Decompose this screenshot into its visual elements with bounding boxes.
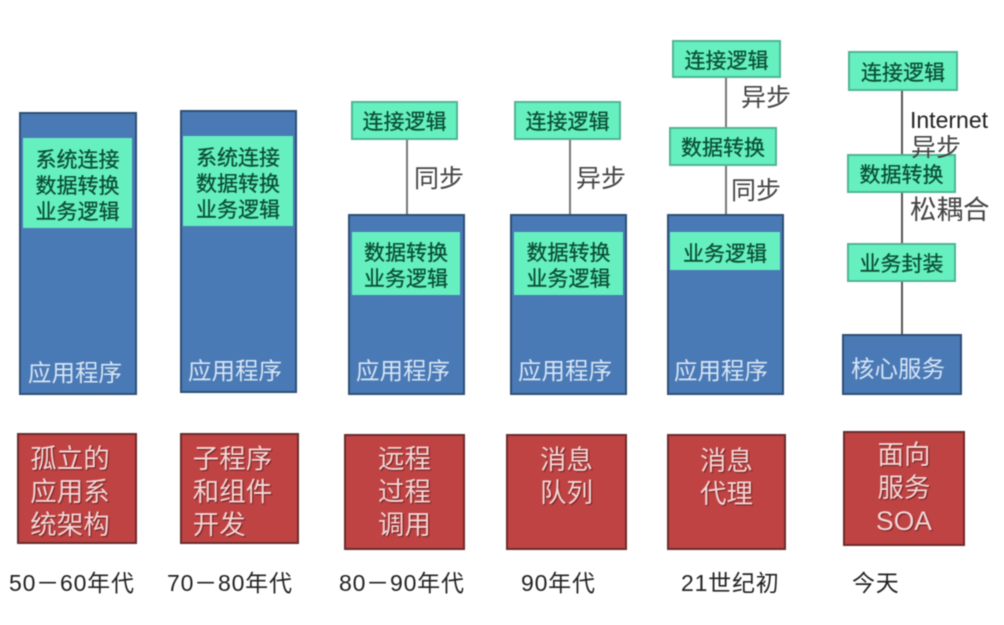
green logic box 1: 业务逻辑 [36,200,120,224]
async label 5: 异步 [741,84,791,112]
green logic box 1: 系统连接 [36,148,120,172]
green logic box 3: 数据转换 [364,242,448,265]
connector line 4 [569,139,571,215]
red box 6: 面向 [878,440,930,470]
blue application block 4 [510,214,627,395]
application label 5: 应用程序 [674,358,768,384]
green logic box 2: 系统连接 [196,146,280,170]
internet label: Internet [910,107,988,133]
green connection box 4: 连接逻辑 [526,111,610,134]
column: early 21st century message broker [666,39,791,596]
blue application block 1 [19,112,137,395]
red box 6 [843,431,965,546]
column: 90s message queue [505,100,628,596]
blue application block 3 [348,214,465,395]
green logic box 1: 数据转换 [36,174,120,198]
red box 3 [344,434,465,550]
green logic box 2 [183,136,293,226]
green transform box 5: 数据转换 [681,137,765,160]
red box 4: 消息 [540,445,593,475]
green logic box 5 [670,232,780,270]
green connection box 5: 连接逻辑 [684,50,768,72]
red box 1: 应用系 [30,477,110,507]
red box 3: 调用 [378,510,431,540]
column: 70-80s subprograms [167,109,300,596]
green logic box 4: 业务逻辑 [526,268,610,291]
red box 1: 孤立的 [30,444,110,474]
red box 2 [180,433,299,544]
green logic box 4 [514,232,623,295]
green connection box 3 [351,101,458,140]
era label 6: 今天 [852,570,900,596]
column: 80-90s remote procedure call [339,100,466,596]
green connection box 4 [514,101,621,140]
green logic box 5: 业务逻辑 [683,242,767,266]
red box 4: 队列 [540,478,593,508]
green logic box 3 [352,232,460,295]
connector line 6 [901,90,903,335]
application label 4: 应用程序 [518,358,612,384]
era label 3: 80－90年代 [339,570,465,596]
red box 6: SOA [876,506,932,536]
sync label 5: 同步 [731,177,781,205]
green service wrapper box: 业务封装 [860,253,944,276]
blue application block 2 [180,110,297,393]
blue application block 5 [667,214,784,395]
red box 3: 远程 [378,444,431,474]
column: 50-60s isolated architecture [9,111,138,596]
red box 6: 服务 [878,473,930,503]
application label 3: 应用程序 [356,358,450,384]
async label 6: 异步 [911,134,961,162]
green transform box 6: 数据转换 [860,164,944,187]
green logic box 1 [23,138,132,228]
green connection box 6 [848,51,958,91]
application label 2: 应用程序 [188,358,282,384]
green logic box 2: 数据转换 [196,172,280,196]
era label 4: 90年代 [521,570,596,596]
green transform box 6 [847,154,956,193]
red box 2: 和组件 [193,477,272,507]
green connection box 5 [672,40,781,78]
red box 4 [506,434,627,550]
red box 1: 统架构 [30,510,110,540]
red box 1 [17,433,137,544]
red box 3: 过程 [378,476,431,506]
green logic box 2: 业务逻辑 [196,198,280,222]
green service wrapper box [847,243,956,282]
connector line 5 [725,77,727,215]
era label 5: 21世纪初 [681,570,780,596]
era label 2: 70－80年代 [167,570,293,596]
green logic box 4: 数据转换 [526,242,610,265]
connector line 3 [406,139,408,215]
red box 5: 消息 [700,446,753,476]
era label 1: 50－60年代 [9,570,135,596]
red box 2: 开发 [193,510,246,540]
sync label 3: 同步 [414,165,464,193]
red box 5 [667,434,786,550]
core service label: 核心服务 [851,356,945,382]
blue core service block [842,334,962,395]
loose coupling label: 松耦合 [910,195,990,225]
red box 2: 子程序 [193,444,272,474]
green connection box 6: 连接逻辑 [861,62,945,84]
application label 1: 应用程序 [28,360,122,386]
red box 5: 代理 [700,479,753,509]
green transform box 5 [669,127,777,166]
async label 4: 异步 [576,165,626,193]
green connection box 3: 连接逻辑 [362,111,446,134]
green logic box 3: 业务逻辑 [364,268,448,291]
